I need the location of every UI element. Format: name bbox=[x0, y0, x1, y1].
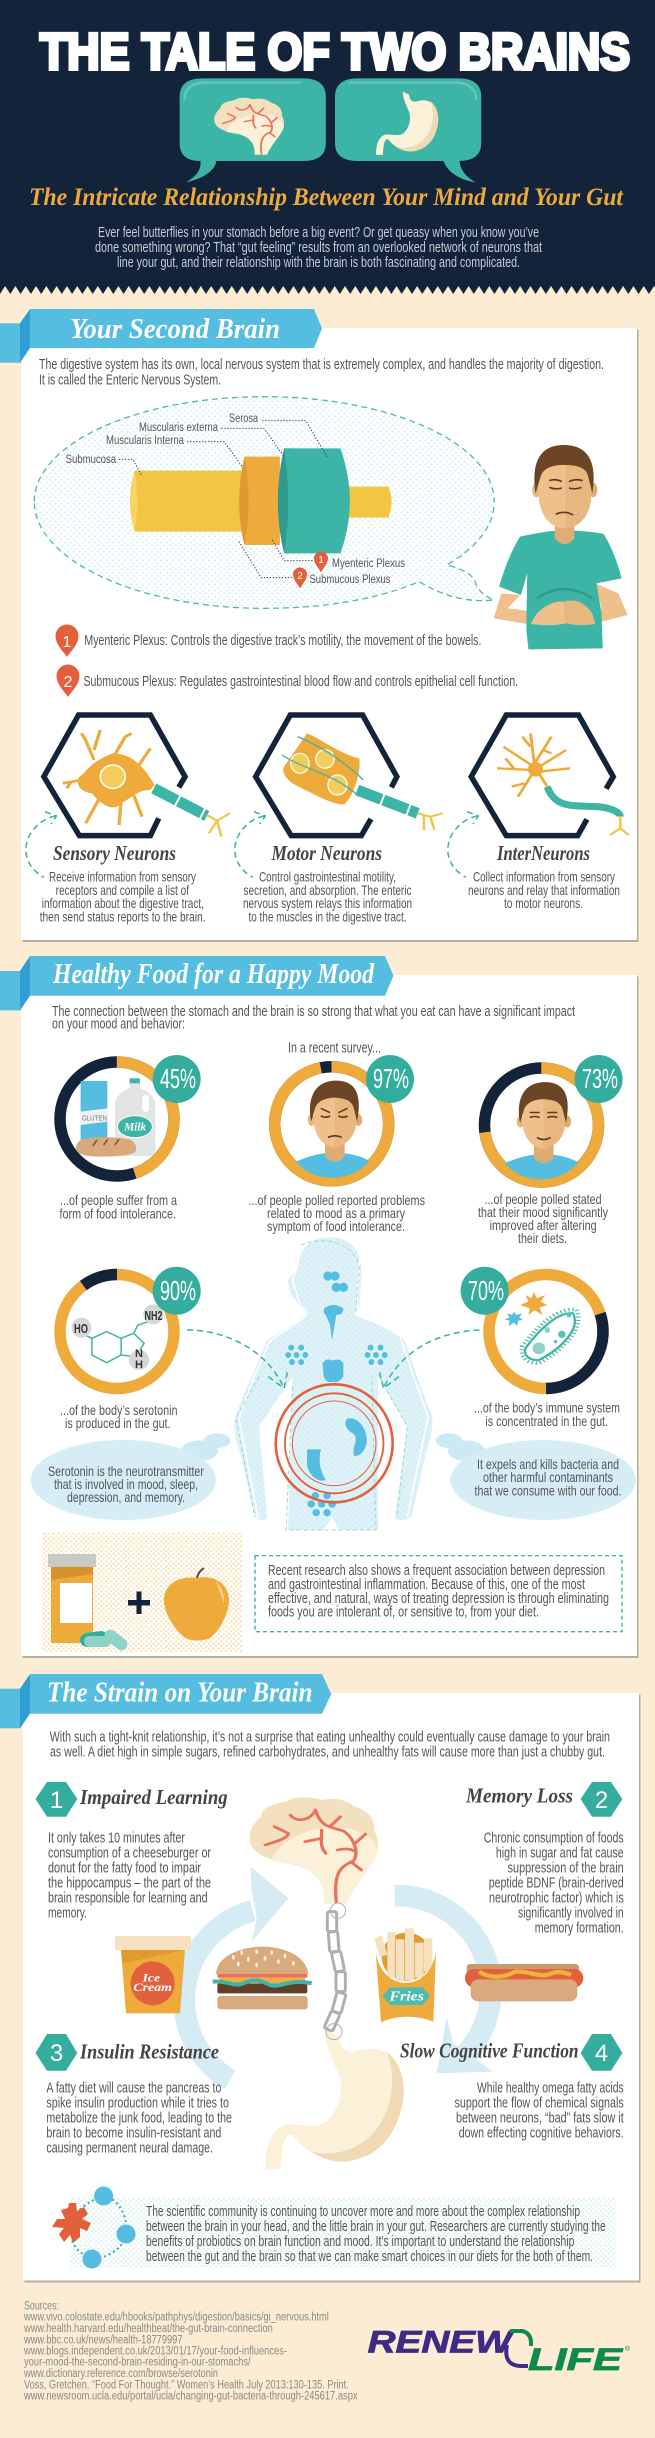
sources: Sources: bbox=[24, 2300, 59, 2312]
block: sensory neurons bbox=[40, 841, 206, 925]
icon: pills bbox=[79, 1627, 130, 1653]
caption: 73%: that their mood significantly bbox=[478, 1204, 608, 1220]
text: insulin resistance: causing permanent neural damage. bbox=[46, 2141, 213, 2157]
stat ring: 45% food intolerance bbox=[60, 1055, 201, 1176]
labels: gut layers: Serosa bbox=[229, 413, 258, 425]
text: memory loss bbox=[484, 1830, 624, 1937]
labels: gut layers: Muscularis Interna bbox=[106, 435, 184, 447]
panel: your second brain bbox=[21, 328, 638, 942]
block: sensory neurons: Receive information from sensory bbox=[49, 869, 196, 885]
sources: your-mood-the-second-brain-residing-in-our-stomachs/ bbox=[24, 2357, 251, 2369]
badge: 70% bbox=[461, 1267, 509, 1315]
pin: myenteric plexus label: 1 bbox=[318, 555, 324, 566]
sources: Voss, Gretchen. “Food For Thought.” Women’s Health July 2013:130-135. Print. bbox=[24, 2379, 349, 2391]
text: insulin resistance: metabolize the junk food, leading to the bbox=[46, 2111, 232, 2127]
thought bubble: serotonin: Serotonin is the neurotransmitter bbox=[48, 1463, 204, 1479]
hex heading 1: impaired learning bbox=[36, 1782, 228, 1817]
dotted leader lines bbox=[119, 421, 328, 578]
caption: 45%: form of food intolerance. bbox=[60, 1205, 176, 1221]
text: impaired learning: consumption of a cheeseburger or bbox=[48, 1845, 211, 1861]
icon: motor neuron bbox=[256, 715, 443, 836]
thought bubble: bacteria bbox=[436, 1433, 636, 1520]
stat ring: 90% serotonin: HO bbox=[74, 1321, 88, 1336]
section intro text bbox=[52, 1004, 575, 1033]
food: hot dog bbox=[465, 1964, 583, 2001]
hex heading 2: memory loss: Memory Loss bbox=[465, 1784, 573, 1808]
gut tube layers bbox=[130, 448, 392, 553]
dotted speech bubble bbox=[34, 397, 494, 608]
text: insulin resistance: spike insulin production while it tries to bbox=[46, 2096, 229, 2112]
caption: 97%: related to mood as a primary bbox=[267, 1205, 405, 1221]
block: sensory neurons: information about the digestive tract, bbox=[42, 895, 204, 911]
illustration: human body with organs bbox=[187, 1237, 480, 1530]
text: impaired learning: donut for the fatty food to impair bbox=[48, 1860, 201, 1876]
panel: strain on your brain bbox=[23, 1693, 640, 2282]
block: motor neurons: to the muscles in the digestive tract. bbox=[248, 909, 406, 925]
caption: 73%: their diets. bbox=[518, 1230, 567, 1246]
labels: gut layers bbox=[66, 413, 258, 466]
header band bbox=[0, 0, 655, 294]
text: impaired learning bbox=[48, 1830, 211, 1921]
organs bbox=[285, 1271, 388, 1516]
hex heading 4: slow cognitive function: Slow Cognitive Function bbox=[400, 2038, 579, 2062]
hex heading 2: memory loss bbox=[465, 1782, 622, 1817]
stat ring: 73% improved mood bbox=[484, 1055, 623, 1182]
pin: submucous plexus label: 2 bbox=[297, 571, 303, 582]
section ribbon: Your Second Brain: Your Second Brain bbox=[70, 314, 280, 345]
caption: 97%: symptom of food intolerance. bbox=[267, 1218, 405, 1234]
key: myenteric plexus bbox=[56, 624, 481, 657]
pin: submucous plexus label: Submucous Plexus bbox=[310, 574, 391, 586]
block: motor neurons bbox=[243, 841, 412, 925]
icon: serotonin molecule bbox=[71, 1304, 163, 1370]
icon: plus sign bbox=[128, 1592, 150, 1614]
section ribbon: The Strain on Your Brain: The Strain on Your Brain bbox=[47, 1678, 312, 1709]
section intro text: on your mood and behavior: bbox=[52, 1017, 185, 1033]
food: fries bbox=[374, 1928, 436, 2022]
dashed arrows to gut bbox=[187, 1330, 480, 1388]
stat ring: 90% serotonin: H bbox=[135, 1359, 143, 1371]
food: ice cream: Ice bbox=[142, 1970, 161, 1984]
caption: immune system bbox=[474, 1400, 620, 1429]
badge: 45%: 45% bbox=[160, 1063, 196, 1094]
panel: healthy food bbox=[21, 975, 638, 1658]
badge: 45% bbox=[153, 1055, 201, 1103]
hex heading 2: memory loss: 2 bbox=[595, 1787, 608, 1814]
icon: gluten and milk: GLUTEN bbox=[82, 1114, 107, 1122]
thought bubble: bacteria: other harmful contaminants bbox=[483, 1469, 613, 1485]
stat ring: 97% mood problems bbox=[275, 1055, 414, 1181]
subtitle: The Intricate Relationship Between Your Mind and Your Gut bbox=[29, 184, 624, 211]
text: insulin resistance: A fatty diet will cause the pancreas to bbox=[46, 2081, 221, 2097]
section ribbon: Healthy Food for a Happy Mood bbox=[0, 956, 394, 1010]
icon: gluten and milk: Milk bbox=[123, 1121, 147, 1133]
stat ring: 90% serotonin: N bbox=[135, 1348, 143, 1360]
text: impaired learning: the hippocampus – the part of the bbox=[48, 1875, 211, 1891]
neuron icons bbox=[44, 715, 629, 837]
section intro text: It is called the Enteric Nervous System. bbox=[39, 372, 221, 388]
pin: myenteric plexus label: Myenteric Plexus bbox=[332, 558, 405, 570]
hex heading 1: impaired learning: 1 bbox=[50, 1787, 63, 1814]
stat ring: 90% serotonin: NH2 bbox=[144, 1308, 162, 1323]
section intro text bbox=[50, 1730, 610, 1761]
caption: 97% bbox=[248, 1192, 425, 1234]
sources: www.blogs.independent.co.uk/2013/01/17/your-food-influences- bbox=[23, 2345, 287, 2357]
diagram: gut wall in speech bubble bbox=[34, 397, 494, 608]
icon: bacteria bbox=[505, 1292, 578, 1363]
logo: Renew Life: ® bbox=[625, 2345, 631, 2353]
logo: Renew Life: RENEW bbox=[368, 2324, 514, 2360]
section intro text bbox=[39, 357, 604, 388]
caption: serotonin bbox=[60, 1402, 178, 1431]
key: myenteric plexus: Myenteric Plexus: Controls the digestive track’s motility, the movement of the bowels. bbox=[84, 633, 481, 649]
badge: 73%: 73% bbox=[582, 1063, 618, 1094]
text: memory loss: memory formation. bbox=[535, 1921, 624, 1937]
illustration: brain chained to stomach bbox=[250, 1797, 404, 2169]
section ribbon: Your Second Brain bbox=[0, 309, 322, 363]
caption: 73%: ...of people polled stated bbox=[485, 1191, 602, 1207]
hex heading 4: slow cognitive function: 4 bbox=[595, 2040, 608, 2067]
stat ring: 90% serotonin bbox=[37, 1252, 201, 1411]
hex heading 3: insulin resistance: 3 bbox=[50, 2040, 63, 2067]
block: interneurons bbox=[468, 841, 620, 911]
hex heading 4: slow cognitive function bbox=[400, 2034, 622, 2071]
key: submucous plexus: 2 bbox=[64, 674, 73, 691]
icon: apple bbox=[164, 1568, 229, 1640]
hex heading 3: insulin resistance bbox=[36, 2034, 219, 2071]
block: interneurons: InterNeurons bbox=[496, 841, 590, 865]
caption: 73% bbox=[478, 1191, 608, 1246]
dashed loop arrows bbox=[26, 812, 478, 877]
intro text bbox=[95, 225, 542, 271]
callout: depression research: foods you are intolerant of, or sensitive to, from your diet. bbox=[268, 1605, 539, 1621]
block: motor neurons: Motor Neurons bbox=[271, 841, 382, 865]
sources: www.dictionary.reference.com/browse/serotonin bbox=[23, 2368, 218, 2380]
key: submucous plexus bbox=[56, 664, 518, 697]
section ribbon: Healthy Food for a Happy Mood: Healthy Food for a Happy Mood bbox=[52, 959, 375, 990]
illustration: pills plus apple bbox=[42, 1532, 242, 1653]
sources: www.bbc.co.uk/news/health-18779997 bbox=[23, 2334, 183, 2346]
text: insulin resistance: brain to become insulin-resistant and bbox=[46, 2126, 221, 2142]
thought bubble: serotonin bbox=[30, 1433, 231, 1520]
badge: 97%: 97% bbox=[373, 1063, 409, 1094]
speech bubble icons: brain and stomach bbox=[180, 78, 481, 182]
caption: serotonin: ...of the body’s serotonin bbox=[60, 1402, 178, 1418]
thought bubble: serotonin: that is involved in mood, sleep, bbox=[54, 1476, 198, 1492]
badge: 90%: 90% bbox=[160, 1275, 196, 1306]
illustration: content man bbox=[505, 1082, 579, 1179]
chain rings bbox=[326, 1903, 346, 2040]
logo: Renew Life: LIFE bbox=[528, 2341, 623, 2377]
sources bbox=[23, 2300, 358, 2402]
food: fries: Fries bbox=[388, 1990, 425, 2005]
food: ice cream bbox=[115, 1936, 191, 2013]
hex heading 3: insulin resistance: Insulin Resistance bbox=[79, 2039, 219, 2063]
labels: gut layers: Muscularis externa bbox=[139, 422, 218, 434]
pin: myenteric plexus label bbox=[314, 552, 405, 572]
pin: submucous plexus label bbox=[293, 568, 391, 588]
icon: interneuron bbox=[471, 715, 629, 836]
block: sensory neurons: receptors and compile a list of bbox=[56, 882, 189, 898]
block: interneurons: to motor neurons. bbox=[504, 895, 583, 911]
caption: serotonin: is produced in the gut. bbox=[65, 1415, 170, 1431]
caption: 45% bbox=[60, 1192, 177, 1221]
closing callout bbox=[52, 2186, 616, 2268]
thought bubble: serotonin: depression, and memory. bbox=[67, 1489, 185, 1505]
icon: gluten and milk bbox=[76, 1078, 155, 1157]
block: motor neurons: Control gastrointestinal motility, bbox=[259, 869, 396, 885]
caption: immune system: is concentrated in the gut. bbox=[485, 1413, 608, 1429]
icon: probiotic cluster bbox=[52, 2186, 136, 2268]
key: myenteric plexus: 1 bbox=[63, 634, 72, 651]
hex heading 1: impaired learning: Impaired Learning bbox=[79, 1785, 228, 1809]
circular arrows bbox=[184, 1867, 493, 2080]
gut target rings bbox=[276, 1384, 393, 1502]
food: ice cream: Cream bbox=[133, 1980, 172, 1994]
sources: www.vivo.colostate.edu/hbooks/pathphys/digestion/basics/gi_nervous.html bbox=[23, 2312, 329, 2324]
caption: 97%: ...of people polled reported problems bbox=[248, 1192, 425, 1208]
chain bbox=[324, 1912, 346, 2031]
icon: pill bottle bbox=[48, 1554, 96, 1643]
labels: gut layers: Submucosa bbox=[66, 454, 117, 466]
block: sensory neurons: Sensory Neurons bbox=[53, 841, 176, 865]
text: impaired learning: memory. bbox=[48, 1905, 87, 1921]
icon: sensory neuron bbox=[44, 715, 230, 837]
badge: 70%: 70% bbox=[468, 1275, 504, 1306]
stat ring: 70% immune system bbox=[461, 1260, 618, 1403]
block: motor neurons: nervous system relays this information bbox=[243, 895, 412, 911]
text: slow cognitive function bbox=[454, 2081, 624, 2142]
text: impaired learning: brain responsible for learning and bbox=[48, 1890, 208, 1906]
food: burger bbox=[213, 1947, 312, 2009]
sources: www.health.harvard.edu/healthbeat/the-gut-brain-connection bbox=[23, 2323, 273, 2335]
callout: depression research bbox=[255, 1556, 622, 1632]
survey label: In a recent survey... bbox=[288, 1041, 381, 1057]
logo: Renew Life bbox=[368, 2324, 631, 2377]
text: impaired learning: It only takes 10 minutes after bbox=[48, 1830, 185, 1846]
sources: www.newsroom.ucla.edu/portal/ucla/changing-gut-bacteria-through-245617.aspx bbox=[23, 2390, 358, 2402]
icon: brain bubble bbox=[180, 78, 326, 182]
block: sensory neurons: then send status reports to the brain. bbox=[40, 909, 206, 925]
icon: stomach bubble bbox=[335, 78, 481, 182]
block: motor neurons: secretion, and absorption. The enteric bbox=[244, 882, 412, 898]
caption: 73%: improved after altering bbox=[490, 1217, 597, 1233]
intro text: line your gut, and their relationship with the brain is both fascinating and complicated. bbox=[117, 255, 520, 271]
text: insulin resistance bbox=[46, 2081, 232, 2157]
section ribbon: The Strain on Your Brain bbox=[0, 1674, 331, 1728]
illustration: man holding stomach bbox=[494, 445, 628, 649]
badge: 90% bbox=[153, 1267, 201, 1315]
illustration: frowning man bbox=[296, 1081, 370, 1178]
caption: 45%: ...of people suffer from a bbox=[60, 1192, 177, 1208]
